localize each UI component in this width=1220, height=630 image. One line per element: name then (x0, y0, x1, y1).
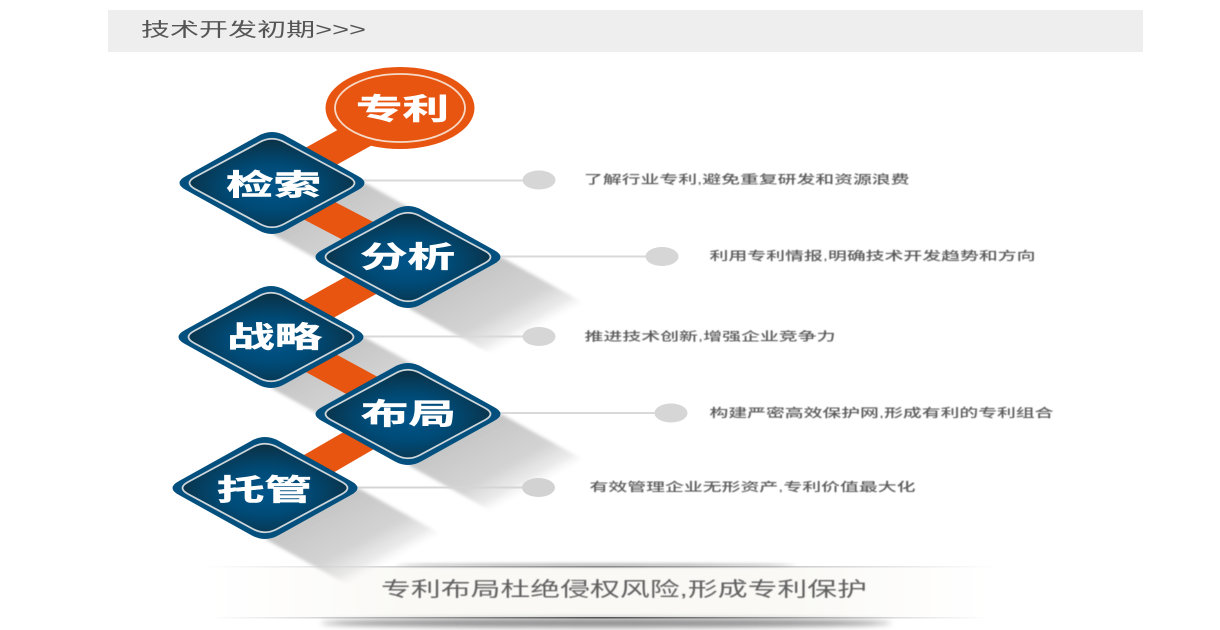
diamond: 检索: 检索 (226, 169, 321, 202)
patent circle: 专利 (356, 93, 449, 126)
row 4: description: 构建严密高效保护网,形成有利的专利组合 (710, 405, 1054, 420)
diamond: 分析: 分析 (360, 241, 455, 274)
row 2: description (495, 247, 1036, 266)
row 4: description (495, 404, 1054, 422)
orange connector (265, 108, 408, 495)
diamond: 托管 (172, 437, 358, 539)
diamond: 布局 (316, 363, 500, 465)
row 3: description (358, 327, 836, 346)
diamond: 检索 (180, 132, 364, 234)
header bar (108, 10, 1143, 52)
row 1: description: 了解行业专利,避免重复研发和资源浪费 (584, 172, 910, 186)
diamond: 战略: 战略 (227, 321, 322, 354)
row 1: description (360, 170, 910, 190)
row 3: description: 推进技术创新,增强企业竞争力 (584, 328, 836, 344)
patent circle (326, 67, 474, 149)
diamond: 布局: 布局 (361, 398, 456, 431)
bottom banner (200, 564, 1000, 628)
diamond shadows (265, 183, 586, 586)
header bar: 技术开发初期>>> (141, 19, 366, 41)
diamond: 托管: 托管 (217, 474, 312, 507)
row 5: description (355, 478, 916, 497)
diamond: 分析 (316, 206, 500, 308)
diamond: 战略 (178, 286, 364, 388)
row 2: description: 利用专利情报,明确技术开发趋势和方向 (710, 248, 1036, 263)
row 5: description: 有效管理企业无形资产,专利价值最大化 (590, 479, 916, 494)
bottom banner: 专利布局杜绝侵权风险,形成专利保护 (381, 578, 867, 601)
